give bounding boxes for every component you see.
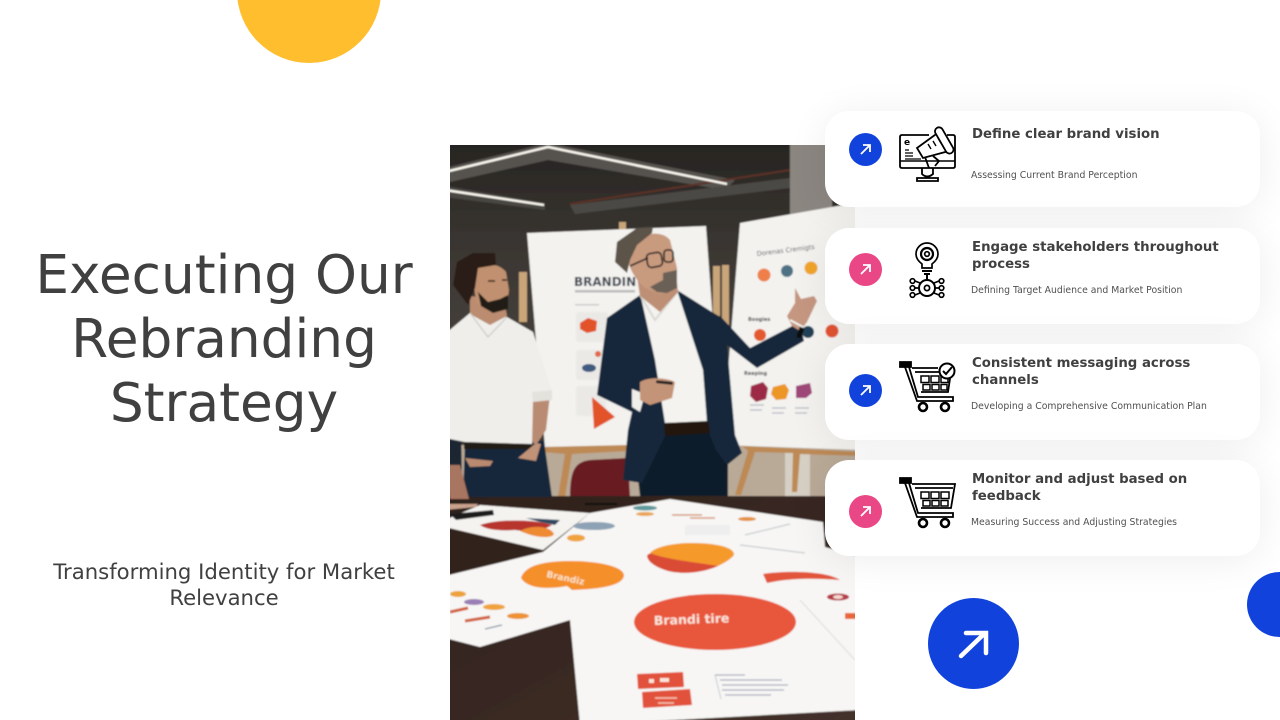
card heading: Engage stakeholders throughout process xyxy=(972,240,1219,272)
half and half pie xyxy=(647,553,718,573)
subtitle xyxy=(53,559,395,610)
icon: lightbulb with gear and network xyxy=(909,242,945,298)
card 3: consistent messaging xyxy=(825,344,1260,440)
presenter xyxy=(597,227,817,496)
large arrow badge xyxy=(928,598,1019,689)
decorative blue circle at right edge xyxy=(1247,572,1280,637)
lower wall and floor xyxy=(450,445,860,500)
card description: Assessing Current Brand Perception xyxy=(971,170,1137,181)
title: Strategy xyxy=(110,372,338,434)
decorative yellow circle xyxy=(237,0,381,63)
right poster xyxy=(722,202,860,450)
arrow badge pink xyxy=(849,494,882,528)
easel legs xyxy=(543,445,628,497)
photo: presenter explaining branding posters to a colleague: Dorenas Cremigts xyxy=(756,243,816,258)
orange pie on sheet xyxy=(521,561,624,590)
title xyxy=(35,244,413,434)
card 2: engage stakeholders xyxy=(825,228,1260,324)
ceiling lights xyxy=(445,147,727,184)
arrow badge blue xyxy=(849,132,882,166)
card heading: Consistent messaging across channels xyxy=(972,356,1190,388)
photo: presenter explaining branding posters to a colleague: Boogies xyxy=(748,317,770,323)
right red chunk xyxy=(763,572,840,583)
card 1: define clear brand vision xyxy=(825,111,1260,207)
left poster xyxy=(527,226,722,448)
colleague xyxy=(445,253,552,499)
icon: shopping cart xyxy=(899,477,956,528)
photo: presenter explaining branding posters to a colleague: Reeping xyxy=(744,371,767,377)
title: Rebranding xyxy=(71,308,377,370)
card description: Defining Target Audience and Market Position xyxy=(971,285,1182,296)
subtitle: Transforming Identity for Market xyxy=(53,559,395,584)
photo: presenter explaining branding posters to a colleague: BRANDIN xyxy=(574,275,636,289)
arrow badge blue xyxy=(849,374,882,406)
subtitle: Relevance xyxy=(169,585,279,610)
hand and phone on table xyxy=(445,504,478,510)
icon: monitor with megaphone xyxy=(899,126,956,182)
red boxes and copy xyxy=(637,672,684,689)
arrow badge pink xyxy=(849,253,882,286)
table xyxy=(445,496,860,720)
icon: shopping cart with check xyxy=(899,361,956,412)
card description: Measuring Success and Adjusting Strategies xyxy=(971,517,1177,528)
printed sheets on table xyxy=(445,505,590,550)
photo: presenter explaining branding posters to a colleague xyxy=(450,145,855,720)
photo: presenter explaining branding posters to a colleague: Brandiz xyxy=(545,570,585,588)
card 4: monitor and adjust xyxy=(825,460,1260,556)
easel wood xyxy=(519,272,527,322)
room background xyxy=(445,140,860,500)
icon: monitor with megaphone: e xyxy=(904,138,910,148)
card description: Developing a Comprehensive Communication Plan xyxy=(971,401,1207,412)
card heading: Monitor and adjust based on feedback xyxy=(972,472,1187,504)
red circle badge xyxy=(634,594,796,650)
photo: presenter explaining branding posters to a colleague: Brandi tire xyxy=(654,610,730,628)
title: Executing Our xyxy=(35,244,413,306)
small swatches left sheet xyxy=(450,591,466,597)
card heading: Define clear brand vision xyxy=(972,127,1160,142)
